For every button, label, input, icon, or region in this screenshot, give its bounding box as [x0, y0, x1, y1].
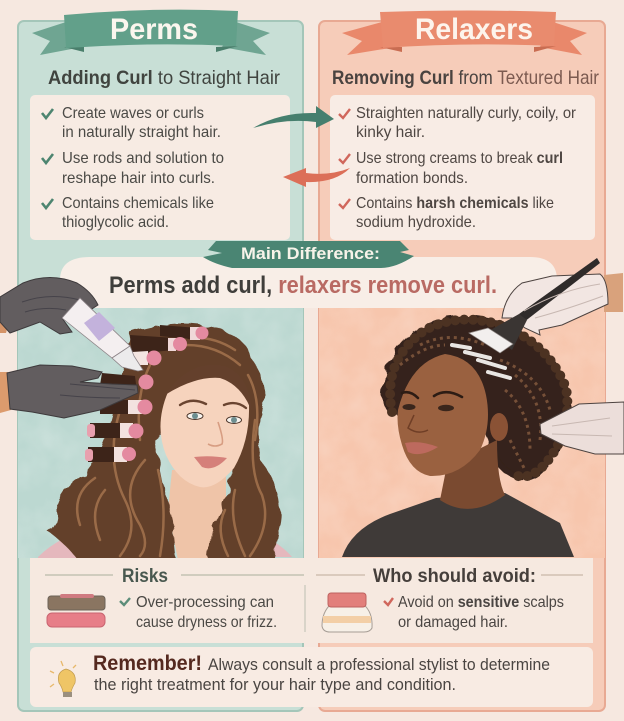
- perms bullet list: Use rods and solution to: [62, 150, 224, 167]
- heading: adding curl: Adding Curl to Straight Hair: [48, 67, 280, 89]
- photo background: [18, 308, 303, 558]
- neck: [440, 440, 505, 509]
- remember text: the right treatment for your hair type and condition.: [94, 676, 456, 694]
- nose: [208, 422, 222, 446]
- illustration: relaxer woman with curly hair: [319, 308, 605, 558]
- arrow: relaxers to perms: [283, 168, 350, 187]
- heading: removing curl: Removing Curl from Textured Hair: [332, 67, 599, 89]
- neck and chest: [168, 470, 226, 560]
- icon: hair rollers: [47, 594, 105, 627]
- eyebrows: [180, 401, 246, 408]
- banner: relaxers: [342, 10, 587, 55]
- check: [339, 199, 350, 208]
- relaxer cream streaks: [452, 345, 510, 378]
- perms bullet list: Create waves or curls: [62, 105, 204, 122]
- nose: [408, 415, 428, 432]
- remember text: [93, 652, 550, 694]
- upper glove fingers: [524, 284, 603, 318]
- relaxers bullet list: kinky hair.: [356, 124, 425, 141]
- eyes: [402, 404, 416, 410]
- lower glove fingers: [552, 418, 612, 436]
- arrow: perms to relaxers: [253, 106, 334, 128]
- perms bullet list: reshape hair into curls.: [62, 170, 215, 187]
- banner: perms: [32, 10, 270, 55]
- icon: cream jar: [322, 593, 372, 632]
- tint brush: [469, 258, 600, 353]
- perms list card: [30, 95, 290, 240]
- avoid text: Avoid on sensitive scalps: [398, 594, 564, 611]
- illustration: perm woman with rollers: [18, 308, 303, 580]
- risks section: cause dryness or frizz.: [136, 614, 277, 631]
- lower wrist: [0, 372, 11, 413]
- section divider: [304, 585, 306, 632]
- rollers: [85, 325, 208, 462]
- roller 1: [160, 325, 190, 340]
- upper glove: [0, 278, 98, 334]
- roller 2: [130, 335, 174, 352]
- roller 7: [88, 447, 116, 462]
- lips: [194, 456, 227, 468]
- curly hair: [385, 319, 567, 478]
- lower glove finger lines: [60, 384, 135, 398]
- lips: [405, 442, 438, 454]
- lower glove: [7, 365, 138, 418]
- main difference statement: Perms add curl, relaxers remove curl.: [109, 272, 497, 299]
- check: [120, 598, 130, 605]
- curly hair edge: [390, 320, 567, 477]
- hair mass right: [206, 402, 282, 558]
- check: [339, 109, 350, 118]
- banner: main difference: Main Difference:: [241, 244, 380, 263]
- fringe: [167, 372, 249, 405]
- upper glove: [502, 274, 608, 335]
- relaxers list card: [330, 95, 595, 240]
- face: [398, 354, 488, 476]
- lower glove: [540, 402, 624, 454]
- panel: relaxers: [319, 21, 605, 711]
- avoid section: or damaged hair.: [398, 614, 508, 631]
- roller 4: [100, 373, 136, 384]
- avoid section: [316, 566, 583, 632]
- relaxers bullet list: [339, 105, 577, 231]
- upper wrist: [0, 320, 8, 333]
- remember text: Always consult a professional stylist to determine: [208, 656, 550, 674]
- relaxers bullet list: Contains harsh chemicals like: [356, 195, 554, 212]
- perms bullet list: [42, 105, 224, 231]
- tube nozzle: [112, 346, 143, 371]
- perms bullet list: Contains chemicals like: [62, 195, 214, 212]
- panel: perms: [18, 21, 303, 711]
- banner: relaxers: Relaxers: [415, 13, 533, 46]
- eyebrows: [402, 392, 462, 398]
- risks text: Over-processing can: [136, 594, 274, 611]
- roller 6: [90, 423, 122, 438]
- relaxers bullet list: Use strong creams to break curl: [356, 150, 563, 167]
- illustration: perm stylist hands with solution bottle: [0, 278, 143, 418]
- hair curl texture: [400, 338, 550, 470]
- cape: [342, 493, 574, 557]
- solution tube: [62, 298, 143, 371]
- check: [42, 109, 53, 118]
- roller 3: [132, 351, 148, 365]
- check: [42, 154, 53, 163]
- banner: main difference: [203, 241, 414, 268]
- remember text: Remember!: [93, 652, 202, 675]
- face: [160, 372, 249, 487]
- panel: risks and avoidance: [30, 558, 593, 643]
- perms bullet list: thioglycolic acid.: [62, 214, 169, 231]
- illustration: relaxer stylist hands with brush: [469, 258, 624, 454]
- main difference pill: [60, 257, 557, 308]
- check: [42, 199, 53, 208]
- perms bullet list: in naturally straight hair.: [62, 124, 221, 141]
- panel: remember: [30, 647, 593, 707]
- avoid heading: Who should avoid:: [373, 566, 536, 587]
- photo background: [319, 308, 605, 558]
- relaxers bullet list: formation bonds.: [356, 170, 468, 187]
- icon: light bulb: [50, 661, 76, 697]
- relaxers bullet list: sodium hydroxide.: [356, 214, 476, 231]
- hair highlights: [77, 338, 265, 556]
- check: [339, 154, 350, 163]
- check: [384, 598, 393, 605]
- upper glove finger lines: [22, 296, 80, 312]
- wrist: [604, 273, 623, 312]
- banner: perms: Perms: [110, 13, 198, 46]
- risks section: [45, 566, 304, 631]
- relaxers bullet list: Straighten naturally curly, coily, or: [356, 105, 577, 122]
- hair mass left: [48, 324, 265, 580]
- roller 5: [100, 400, 128, 414]
- eyes: [187, 412, 203, 420]
- tube label: [84, 312, 115, 341]
- shirt: [38, 540, 292, 558]
- ear: [490, 413, 508, 441]
- risks heading: Risks: [122, 566, 168, 587]
